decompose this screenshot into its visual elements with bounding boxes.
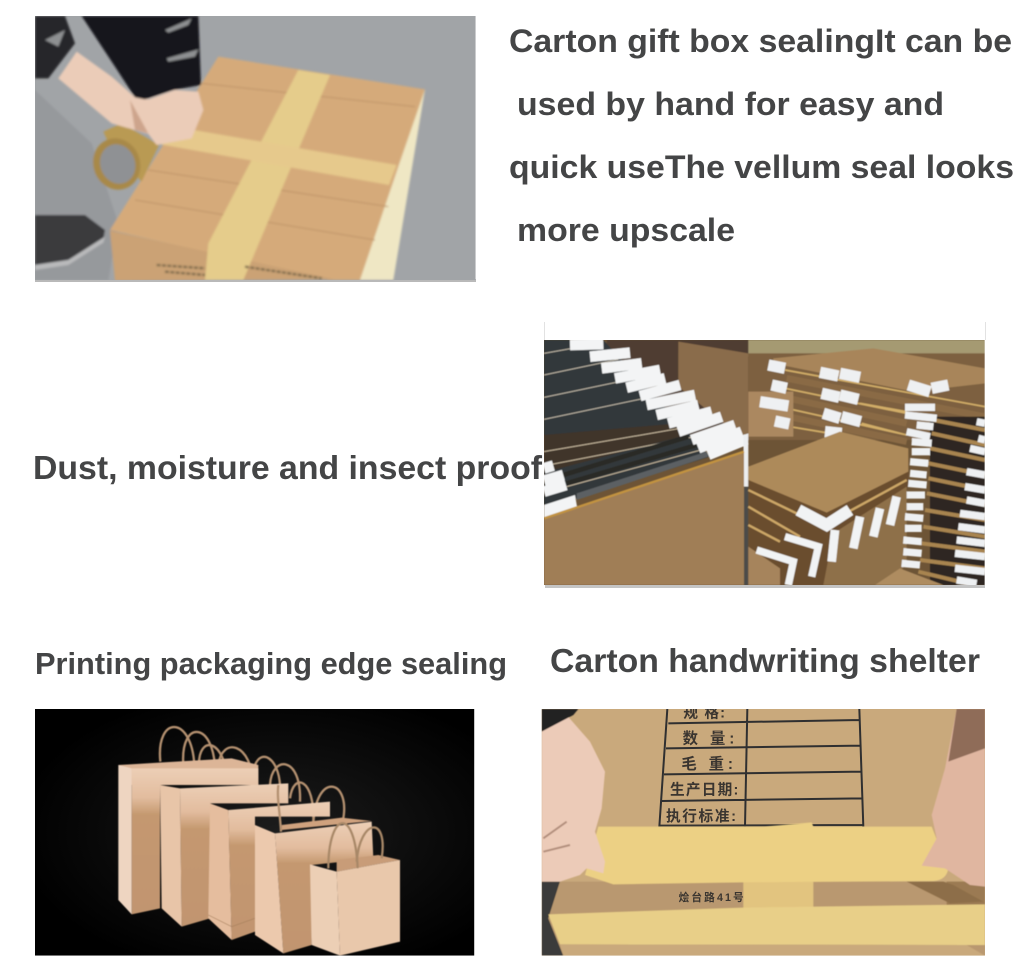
heading: dust, moisture and insect proof: Dust, moisture and insect proof: [33, 449, 543, 486]
bag 5: [337, 855, 400, 872]
bag 2: [180, 783, 288, 927]
right stack: [930, 417, 985, 585]
bag 3: [228, 802, 330, 940]
printed table on carton: 执行标准:: [666, 807, 736, 825]
shoe: [35, 215, 105, 265]
bag 4: [275, 822, 373, 953]
photo: hands peeling kraft tape over carton label: 烩台路41号: [679, 891, 744, 904]
back stacks: [773, 348, 985, 392]
photo shadow lines: [35, 279, 986, 588]
printed table on carton: 生产日期:: [670, 781, 738, 798]
sleeves: [82, 16, 201, 99]
hands: [542, 715, 605, 882]
photo: stacked frames with white corner protectors: [544, 340, 985, 585]
peeled tape strip: [585, 822, 948, 884]
bag 1: [118, 758, 258, 785]
text block: carton gift box sealing: used by hand for easy and: [517, 86, 944, 122]
printed table on carton: 规 格:: [683, 704, 725, 722]
front panel of frame: [544, 452, 744, 585]
hands: [58, 52, 203, 145]
printed table on carton: [659, 704, 863, 827]
text block: carton gift box sealing: [509, 23, 1014, 248]
text block: carton gift box sealing: Carton gift box sealingIt can be: [509, 23, 1012, 59]
printed table on carton: 毛 重:: [681, 755, 733, 773]
heading: carton handwriting shelter: Carton handwriting shelter: [550, 642, 980, 679]
photo: kraft paper bags on black: [35, 709, 474, 956]
left fan of frames: [544, 340, 710, 510]
lower carton and tape: [542, 882, 563, 956]
text block: carton gift box sealing: quick useThe vellum seal looks: [509, 149, 1014, 185]
box top face: [110, 57, 425, 280]
printed table on carton: 数 量:: [683, 730, 734, 747]
tape roll: [103, 123, 159, 182]
photo: hand sealing carton with tape: [35, 16, 476, 281]
text block: carton gift box sealing: more upscale: [517, 212, 735, 248]
tape cross: [205, 70, 330, 280]
middle stack: [748, 432, 908, 513]
heading: printing packaging edge sealing: Printing packaging edge sealing: [35, 646, 507, 681]
photo: hands peeling kraft tape over carton label: [542, 704, 985, 956]
